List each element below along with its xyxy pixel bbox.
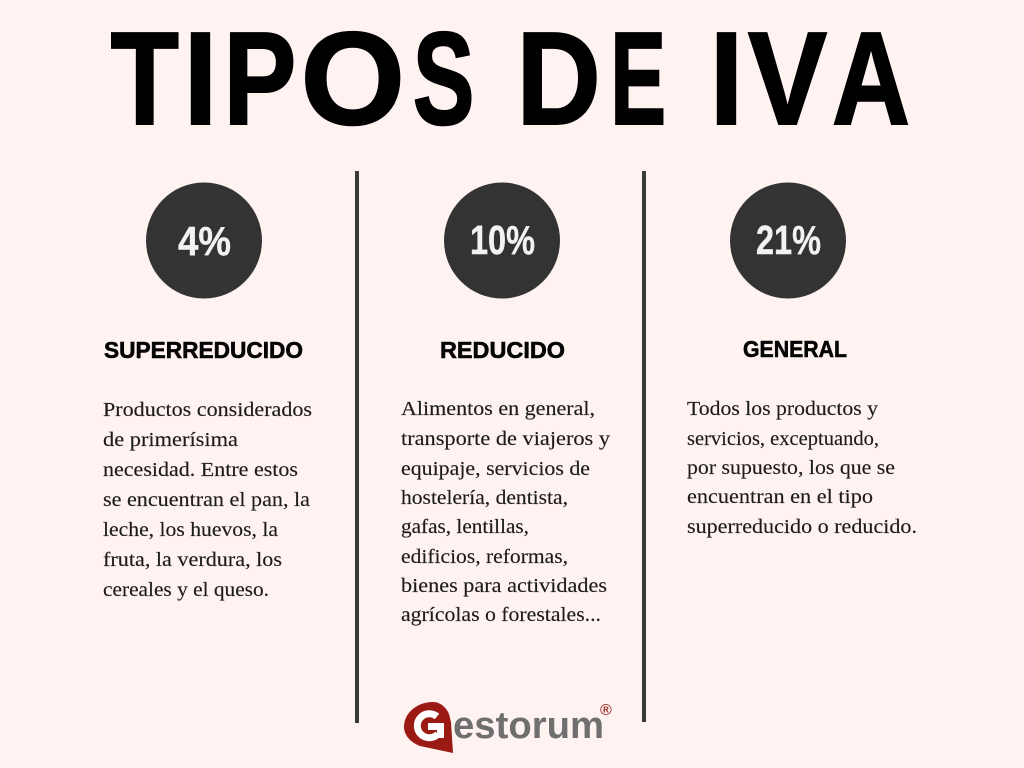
badge: 4%: 4% — [178, 218, 231, 264]
text block: reducido: equipaje, servicios de — [401, 458, 590, 480]
heading: reducido: REDUCIDO — [440, 337, 565, 363]
title — [111, 5, 910, 152]
text block: reducido: bienes para actividades — [401, 575, 607, 597]
heading: general: GENERAL — [743, 336, 847, 362]
logo: gestorum — [404, 702, 612, 753]
badge: 10%: 10% — [470, 217, 535, 263]
badge: 21% — [730, 182, 846, 298]
text block: general: encuentran en el tipo — [687, 486, 873, 508]
heading: superreducido: SUPERREDUCIDO — [104, 337, 303, 363]
title: O — [301, 5, 405, 152]
registered mark: ® — [600, 702, 612, 719]
divider: right — [642, 171, 646, 722]
divider: left — [355, 171, 359, 723]
title: D — [516, 5, 601, 152]
text block: reducido: hostelería, dentista, — [401, 487, 568, 509]
icon: map pin with G — [404, 702, 453, 753]
text block: general: servicios, exceptuando, — [687, 428, 879, 450]
text block: reducido: edificios, reformas, — [401, 546, 568, 568]
title: T — [111, 5, 179, 152]
panel: general — [687, 182, 917, 538]
text block: superreducido: leche, los huevos, la — [103, 519, 278, 541]
text block: reducido: agrícolas o forestales... — [401, 604, 601, 626]
text block: superreducido: necesidad. Entre estos — [103, 459, 298, 481]
text block: superreducido: se encuentran el pan, la — [103, 489, 310, 511]
text block: superreducido: fruta, la verdura, los — [103, 549, 282, 571]
title: V — [748, 5, 827, 152]
text block: general — [687, 398, 917, 538]
badge: 10% — [444, 182, 560, 298]
wordmark: estorum — [453, 705, 604, 747]
text block: reducido: gafas, lentillas, — [401, 516, 529, 538]
title: E — [610, 5, 666, 152]
badge: 21%: 21% — [756, 217, 821, 263]
text block: general: Todos los productos y — [687, 398, 878, 420]
title: P — [224, 5, 296, 152]
panel: superreducido — [103, 182, 312, 601]
title: I — [184, 5, 217, 152]
text block: superreducido: cereales y el queso. — [103, 579, 269, 601]
text block: reducido: transporte de viajeros y — [401, 428, 610, 450]
text block: general: superreducido o reducido. — [687, 516, 917, 538]
badge: 4% — [146, 182, 262, 298]
text block: superreducido: de primerísima — [103, 429, 238, 451]
title: S — [413, 5, 474, 152]
text block: superreducido: Productos considerados — [103, 399, 312, 421]
text block: reducido — [401, 398, 610, 626]
text block: reducido: Alimentos en general, — [401, 398, 595, 420]
text block: superreducido — [103, 399, 312, 601]
title: A — [832, 5, 910, 152]
text block: general: por supuesto, los que se — [687, 457, 895, 479]
title: I — [710, 5, 743, 152]
panel: reducido — [401, 182, 610, 626]
